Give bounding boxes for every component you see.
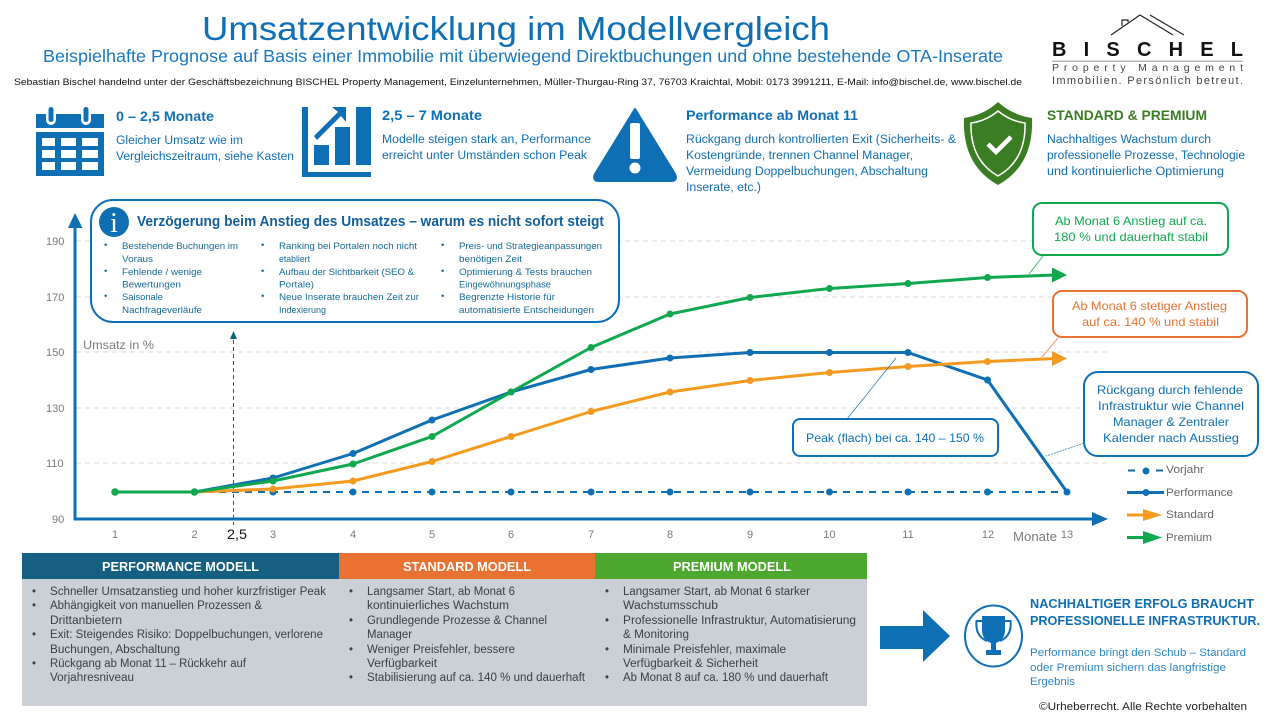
x axis labels: 5 (429, 529, 435, 541)
y axis labels: 90 (52, 514, 64, 526)
logo: Immobilien. Persönlich betreut. (1052, 75, 1243, 87)
subtitle: Beispielhafte Prognose auf Basis einer Immobilie mit überwiegend Direktbuchungen und ohne bestehende OTA-Inserate (43, 46, 1003, 66)
column 1: Voraus (122, 254, 153, 265)
callout: Standard: auf ca. 140 % und stabil (1082, 315, 1219, 329)
callout: Peak (793, 358, 998, 456)
column 1: Bestehende Buchungen im (122, 241, 238, 252)
callout: Peak: Peak (flach) bei ca. 140 – 150 % (806, 431, 984, 445)
column 3: Preis- und Strategieanpassungen (459, 241, 602, 252)
marker at 2,5 months (227, 331, 247, 542)
column 2: Aufbau der Sichtbarkeit (SEO & (279, 267, 415, 278)
x axis labels: 3 (270, 529, 276, 541)
callout heading: Verzögerung beim Anstieg des Umsatzes – warum es nicht sofort steigt (137, 214, 604, 230)
x axis labels: 6 (508, 529, 514, 541)
y axis labels: 170 (46, 292, 64, 304)
marker at 2,5 months: 2,5 (227, 526, 247, 542)
bullet list: • (349, 644, 353, 656)
column 2: Portale) (279, 280, 314, 290)
copyright: ©Urheberrecht. Alle Rechte vorbehalten (1039, 701, 1247, 713)
description: Gleicher Umsatz wie im (116, 135, 243, 147)
conclusion body (1030, 647, 1246, 688)
bullet list: Manager (367, 629, 412, 641)
x axis labels: 1 (112, 529, 118, 541)
column 1: • (104, 240, 107, 251)
column 2: Ranking bei Portalen noch nicht (279, 241, 417, 252)
legend (1127, 464, 1233, 544)
bullet list: Professionelle Infrastruktur, Automatisierung (623, 615, 856, 627)
conclusion heading: PROFESSIONELLE INFRASTRUKTUR. (1030, 614, 1260, 628)
y axis labels: 130 (46, 403, 64, 415)
bullet list: • (605, 586, 609, 598)
bullet list: Ab Monat 8 auf ca. 180 % und dauerhaft (623, 672, 829, 684)
bullet list: Stabilisierung auf ca. 140 % und dauerhaft (367, 672, 586, 684)
description (686, 134, 956, 194)
description: professionelle Prozesse, Technologie (1047, 150, 1245, 162)
panel: model table background (22, 579, 867, 706)
y axis labels: 110 (46, 458, 64, 470)
column 2: Indexierung (279, 305, 326, 316)
description: Modelle steigen stark an, Performance (382, 134, 591, 146)
icon: info (99, 207, 129, 239)
panel: Premium Modell (595, 553, 867, 684)
series: Premium (111, 268, 1067, 496)
callout: Rückgang (1046, 372, 1258, 456)
legend: Performance: Performance (1166, 487, 1233, 499)
column 2: • (261, 291, 264, 302)
bullet list: Schneller Umsatzanstieg und hoher kurzfristiger Peak (50, 586, 326, 598)
conclusion body: Ergebnis (1030, 676, 1076, 688)
column 3 (441, 240, 602, 316)
bullet list (605, 586, 856, 684)
column 3: Optimierung & Tests brauchen (459, 267, 592, 278)
column 1: • (104, 291, 107, 302)
column 1: Bewertungen (122, 280, 181, 290)
x axis labels: 10 (823, 529, 836, 541)
icon: info: i (110, 208, 118, 239)
bullet list: • (32, 586, 36, 598)
conclusion body: Performance bringt den Schub – Standard (1030, 647, 1246, 659)
x axis labels: 2 (191, 529, 198, 541)
description: und kontinuierliche Optimierung (1047, 166, 1224, 178)
bullet list: kontinuierliches Wachstum (367, 600, 509, 612)
description: Kostengründe, trennen Channel Manager, (686, 150, 913, 162)
column 3: Begrenzte Historie für (459, 292, 556, 303)
series: Vorjahr (115, 488, 1067, 496)
bullet list: Vorjahresniveau (50, 672, 134, 684)
column 1: Saisonale (122, 292, 163, 303)
panel: 2,5 bis 7 Monate (302, 107, 591, 177)
bullet list: • (349, 586, 353, 598)
callout: Standard (1042, 291, 1247, 357)
bullet list (349, 586, 586, 684)
x axis labels: 8 (667, 529, 673, 541)
column 3: Eingewöhnungsphase (459, 280, 551, 290)
conclusion heading: NACHHALTIGER ERFOLG BRAUCHT (1030, 597, 1254, 611)
logo: Property Management (1052, 62, 1243, 74)
callout: Rückgang: Manager & Zentraler (1113, 415, 1229, 429)
y axis labels (46, 236, 64, 526)
column 1: Nachfrageverläufe (122, 305, 202, 316)
x axis labels: 11 (902, 529, 914, 541)
bullet list: • (32, 600, 36, 612)
callout: Premium: 180 % und dauerhaft stabil (1054, 230, 1208, 244)
bullet list: Verfügbarkeit (367, 658, 438, 670)
panel: Standard und Premium (964, 102, 1245, 185)
logo (1052, 15, 1243, 87)
icon: trophy (965, 606, 1022, 666)
column 1: • (104, 266, 107, 277)
bullet list: Verfügbarkeit & Sicherheit (623, 658, 759, 670)
column 3: • (441, 240, 444, 251)
column 3: benötigen Zeit (459, 254, 522, 265)
icon: shield (964, 102, 1032, 185)
bullet list: Grundlegende Prozesse & Channel (367, 615, 547, 627)
title: Umsatzentwicklung im Modellvergleich (202, 10, 830, 47)
callout: Rückgang: Rückgang durch fehlende (1097, 383, 1243, 397)
conclusion heading (1030, 597, 1260, 628)
conclusion text (1030, 597, 1260, 688)
icon: calendar (36, 107, 104, 176)
description: Nachhaltiges Wachstum durch (1047, 134, 1211, 146)
bullet list: • (605, 672, 609, 684)
x axis labels: 7 (588, 529, 594, 541)
bullet list: Rückgang ab Monat 11 – Rückkehr auf (50, 658, 247, 670)
bullet list: Abhängigkeit von manuellen Prozessen & (50, 600, 262, 612)
axis title: Monate: Monate (1013, 530, 1057, 544)
header (595, 553, 867, 579)
x axis labels: 13 (1061, 529, 1073, 541)
bullet list: • (32, 658, 36, 670)
callout: Verzögerung (91, 200, 619, 322)
bullet list: Buchungen, Abschaltung (50, 644, 180, 656)
description: Vergleichszeitraum, siehe Kasten (116, 151, 294, 163)
column 2: • (261, 266, 264, 277)
bullet list: Drittanbietern (50, 615, 122, 627)
column 2 (261, 240, 420, 316)
panel: Performance ab Monat 11 (594, 107, 956, 194)
heading: Performance ab Monat 11 (686, 107, 858, 123)
bullet list: • (349, 615, 353, 627)
bullet list: Langsamer Start, ab Monat 6 starker (623, 586, 810, 598)
series: Standard (115, 351, 1067, 492)
panel: Performance Modell (22, 553, 339, 684)
column 3: • (441, 266, 444, 277)
panel: Standard Modell (339, 553, 595, 684)
description: Inserate, etc.) (686, 182, 761, 194)
y axis labels: 150 (46, 347, 64, 359)
column 2: etabliert (279, 254, 310, 265)
description (1047, 134, 1245, 178)
logo: BISCHEL (1052, 39, 1243, 61)
y axis arrow (68, 213, 82, 520)
arrow (880, 610, 950, 662)
bullet list: • (32, 629, 36, 641)
bullet list: Exit: Steigendes Risiko: Doppelbuchungen, verlorene (50, 629, 323, 641)
heading: 0 – 2,5 Monate (116, 108, 214, 124)
icon: warning triangle (594, 109, 676, 181)
x axis labels: 12 (982, 529, 994, 541)
heading: 2,5 – 7 Monate (382, 107, 482, 123)
description (116, 135, 294, 163)
header (22, 553, 339, 579)
legend: Vorjahr: Vorjahr (1166, 464, 1204, 476)
column 1 (104, 240, 238, 316)
description: erreicht unter Umständen schon Peak (382, 150, 587, 162)
heading: STANDARD & PREMIUM (1047, 107, 1207, 123)
line chart (46, 213, 1108, 544)
bullet list: • (605, 615, 609, 627)
bullet list (32, 586, 326, 684)
callout: Rückgang: Kalender nach Ausstieg (1103, 431, 1239, 445)
x axis labels: 9 (747, 529, 753, 541)
column 1: Fehlende / wenige (122, 267, 202, 278)
bullet list: Minimale Preisfehler, maximale (623, 644, 786, 656)
description: Vermeidung Doppelbuchungen, Abschaltung (686, 166, 928, 178)
legend: Premium: Premium (1166, 532, 1212, 544)
column 3: automatisierte Entscheidungen (459, 305, 594, 316)
x axis labels: 4 (350, 529, 356, 541)
bullet list: Wachstumsschub (623, 600, 718, 612)
bullet list: & Monitoring (623, 629, 689, 641)
column 3: • (441, 291, 444, 302)
conclusion body: oder Premium sichern das langfristige (1030, 662, 1226, 674)
callout: Rückgang: Infrastruktur wie Channel (1098, 399, 1244, 413)
bullet list: • (605, 644, 609, 656)
legend: Standard: Standard (1166, 509, 1214, 521)
axis title: Umsatz: Umsatz in % (83, 338, 154, 352)
x axis labels (112, 529, 1073, 541)
header (339, 553, 595, 579)
panel: 0 bis 2,5 Monate (36, 107, 294, 176)
x axis arrow (74, 512, 1108, 526)
description: Rückgang durch kontrollierten Exit (Sicherheits- & (686, 134, 956, 146)
bullet list: Langsamer Start, ab Monat 6 (367, 586, 515, 598)
callout: Standard: Ab Monat 6 stetiger Anstieg (1072, 299, 1227, 313)
callout: Premium: Ab Monat 6 Anstieg auf ca. (1055, 214, 1207, 228)
header: PREMIUM MODELL (673, 560, 791, 574)
header: PERFORMANCE MODELL (102, 560, 259, 574)
bullet list: • (349, 672, 353, 684)
icon: growth chart (302, 107, 371, 177)
callout: Premium (1029, 203, 1228, 274)
bullet list: Weniger Preisfehler, bessere (367, 644, 515, 656)
header: STANDARD MODELL (403, 560, 531, 574)
column 2: Neue Inserate brauchen Zeit zur (279, 292, 420, 303)
column 2: • (261, 240, 264, 251)
y axis labels: 190 (46, 236, 64, 248)
series: Performance (115, 349, 1070, 496)
description (382, 134, 591, 162)
contact line: Sebastian Bischel handelnd unter der Geschäftsbezeichnung BISCHEL Property Management, Einzelunternehmen, Müller-Thurgau-Ring 37, 76703 Kraichtal, Mobil: 0173 3991211, E-Mail: info@bischel.de, www.bischel.de (14, 77, 1022, 88)
